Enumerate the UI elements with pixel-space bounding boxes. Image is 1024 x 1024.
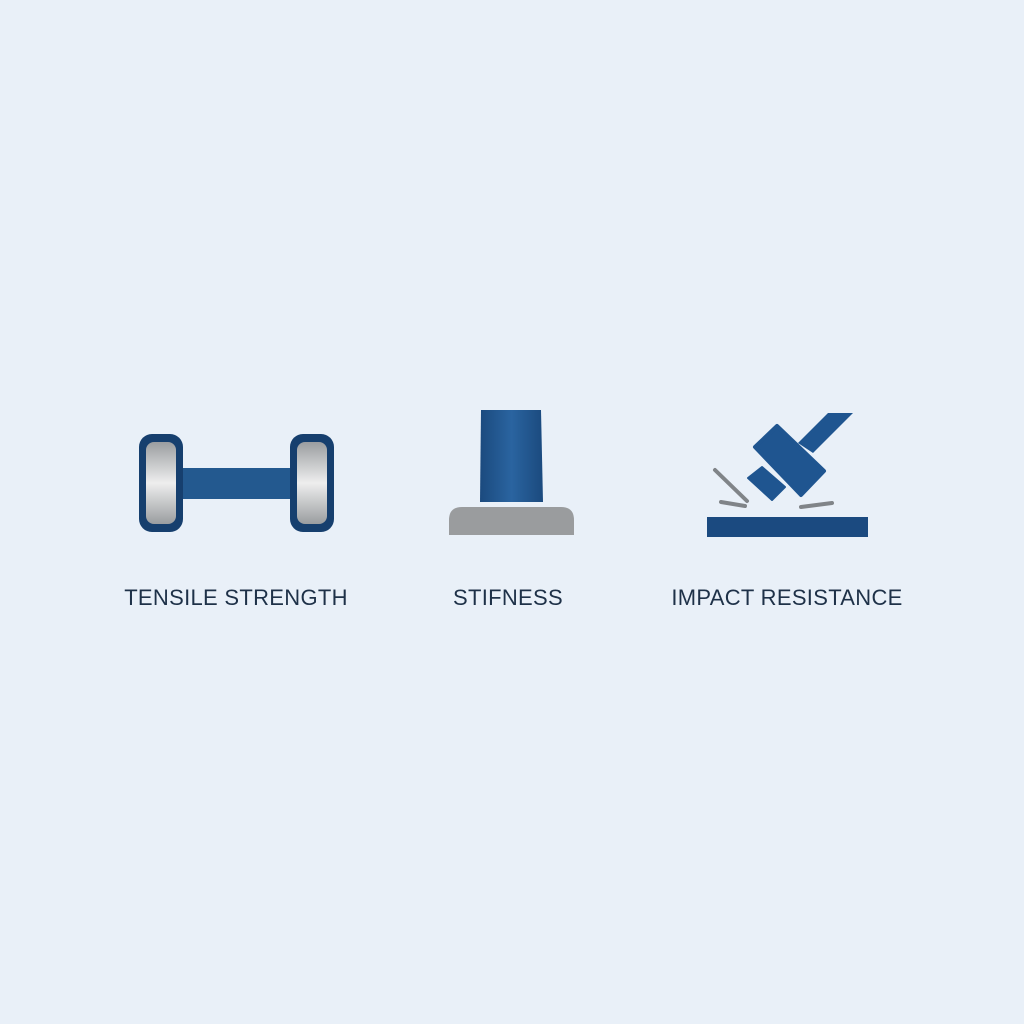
label: stiffness: STIFNESS — [453, 585, 563, 610]
label: tensile strength: TENSILE STRENGTH — [124, 585, 348, 610]
label: impact resistance: IMPACT RESISTANCE — [671, 585, 903, 610]
